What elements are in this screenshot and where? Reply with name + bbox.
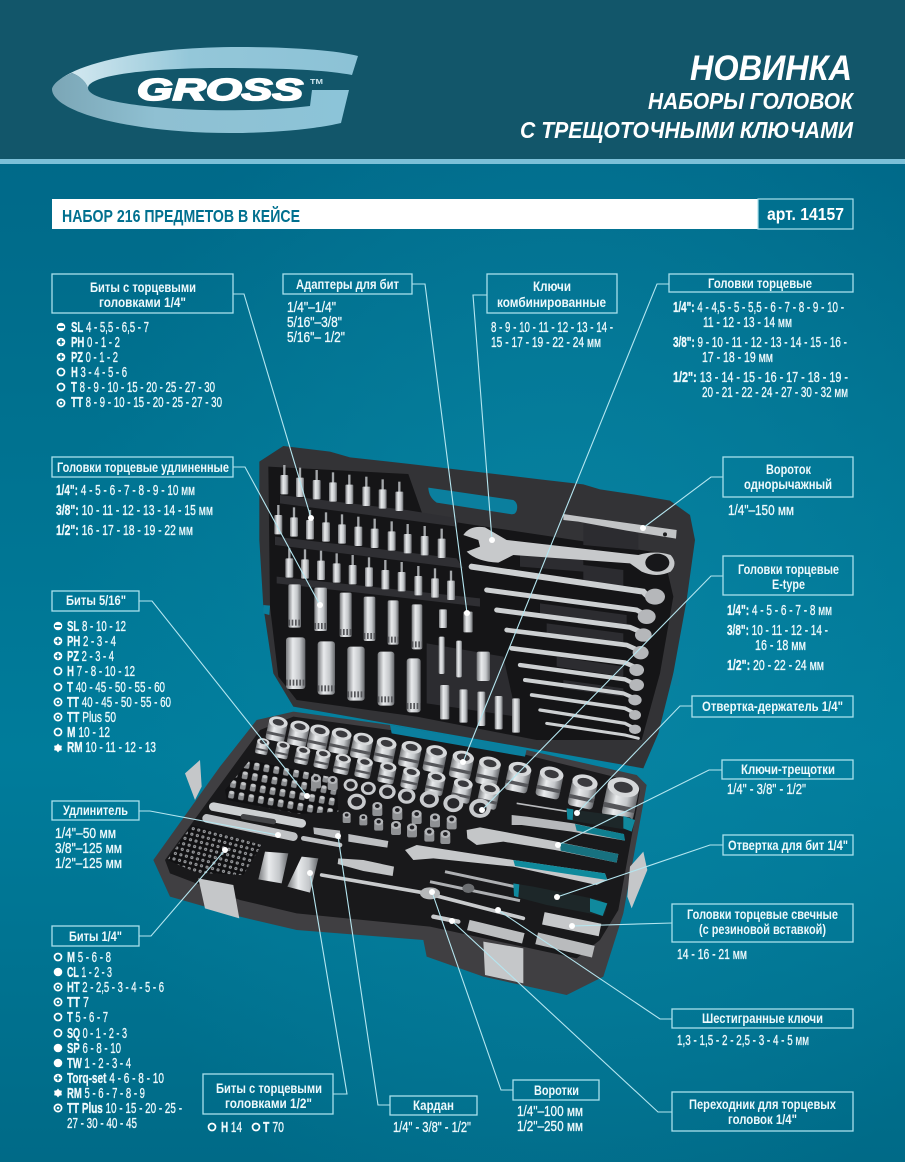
callout: головки торцевые свечные bbox=[672, 904, 853, 963]
callout: биты 1/4: SQ 0 - 1 - 2 - 3 bbox=[67, 1026, 127, 1042]
second row sockets bbox=[255, 737, 501, 810]
callout: удлинитель: Удлинитель bbox=[63, 802, 128, 818]
callout: биты 5/16: TT 40 - 45 - 50 - 55 - 60 bbox=[67, 695, 171, 711]
callout: биты 5/16 bbox=[52, 591, 171, 756]
callout: биты 1/4: TT 7 bbox=[67, 995, 89, 1011]
callout: головки торцевые свечные: (с резиновой вставкой) bbox=[699, 921, 826, 937]
callout: адаптеры для бит: 1/4"–1/4" bbox=[287, 300, 336, 316]
spark plug sockets bbox=[468, 918, 600, 952]
callout: биты 5/16: PZ 2 - 3 - 4 bbox=[67, 649, 114, 665]
callout: кардан: 1/4" - 3/8" - 1/2" bbox=[393, 1120, 471, 1136]
lid inner recess bbox=[268, 467, 673, 740]
callout: головки торцевые свечные: 14 - 16 - 21 мм bbox=[677, 947, 747, 963]
lid shell bbox=[259, 446, 695, 768]
callout: отвертка-держатель bbox=[692, 696, 853, 717]
callout: удлинитель bbox=[52, 801, 139, 872]
callout: головки торцевые удлиненные bbox=[52, 457, 233, 539]
callout: воротки: Воротки bbox=[534, 1082, 579, 1098]
callout: воротки: 1/4"–100 мм bbox=[517, 1104, 583, 1120]
callout: биты 5/16: TT Plus 50 bbox=[67, 710, 116, 726]
tool case: lower tray bbox=[153, 712, 647, 995]
callout: биты 1/4: Torq-set 4 - 6 - 8 - 10 bbox=[67, 1071, 164, 1087]
callout: биты с торцевыми головками 1/4: Биты с торцевыми bbox=[90, 279, 196, 295]
title: С ТРЕЩОТОЧНЫМИ КЛЮЧАМИ bbox=[520, 117, 853, 143]
callout: биты 1/4 bbox=[52, 926, 182, 1132]
callout: биты с торцевыми головками 1/4: T 8 - 9 - 10 - 15 - 20 - 25 - 27 - 30 bbox=[71, 380, 215, 396]
socket knurled ends bbox=[286, 623, 422, 706]
large combination wrench bbox=[463, 527, 674, 575]
callout: головки торцевые e-type: E-type bbox=[772, 576, 805, 592]
callout: шестигранные ключи bbox=[672, 1009, 853, 1049]
callout: адаптеры для бит: Адаптеры для бит bbox=[296, 276, 399, 292]
tray inner black bbox=[165, 717, 640, 958]
callout: ключи-трещотки: Ключи-трещотки bbox=[741, 761, 835, 777]
callout: головки торцевые e-type: Головки торцевые bbox=[738, 561, 839, 577]
callout: воротки: 1/2"–250 мм bbox=[517, 1119, 583, 1135]
callout: кардан: Кардан bbox=[413, 1097, 454, 1113]
long bars bbox=[322, 875, 523, 922]
header band bbox=[0, 0, 905, 164]
callout: головки торцевые: 11 - 12 - 13 - 14 мм bbox=[703, 315, 792, 331]
callout: биты с торцевыми головками 1/4: головками 1/4" bbox=[99, 294, 186, 310]
extensions bbox=[207, 807, 340, 845]
deep sockets row 1 bbox=[288, 584, 422, 649]
combination wrenches bbox=[472, 567, 660, 738]
callout: биты с торцевыми головками 1/2 bbox=[203, 1074, 333, 1136]
callout: биты 1/4: M 5 - 6 - 8 bbox=[67, 950, 111, 966]
callout: биты 1/4: T 5 - 6 - 7 bbox=[67, 1010, 108, 1026]
callout: ключи комбинированные: 15 - 17 - 19 - 22 - 24 мм bbox=[491, 335, 601, 351]
top row sockets bbox=[265, 715, 641, 822]
callout: кардан bbox=[390, 1096, 477, 1136]
callout: биты с торцевыми головками 1/4: TT 8 - 9 - 10 - 15 - 20 - 25 - 27 - 30 bbox=[71, 395, 222, 411]
callout: головки торцевые удлиненные: 3/8": 10 - 11 - 12 - 13 - 14 - 15 мм bbox=[56, 503, 213, 519]
callout: головки торцевые e-type: 3/8": 10 - 11 - 12 - 14 - bbox=[727, 623, 828, 639]
callout: ключи комбинированные: 8 - 9 - 10 - 11 - 12 - 13 - 14 - bbox=[491, 320, 613, 336]
callout: биты 1/4: TT Plus 10 - 15 - 20 - 25 - bbox=[67, 1101, 182, 1117]
callout: биты 5/16: Биты 5/16" bbox=[66, 592, 126, 608]
callout: биты 5/16: M 10 - 12 bbox=[67, 725, 110, 741]
callout: биты 5/16: H 7 - 8 - 10 - 12 bbox=[67, 664, 135, 680]
callout: биты 1/4: TW 1 - 2 - 3 - 4 bbox=[67, 1056, 131, 1072]
title: НОВИНКА bbox=[690, 49, 852, 88]
ratchets bbox=[405, 815, 625, 885]
tool case: open lid bbox=[259, 446, 695, 768]
callout: биты с торцевыми головками 1/4: PZ 0 - 1 - 2 bbox=[71, 350, 118, 366]
callout: отвертка для бит bbox=[723, 835, 853, 855]
row 1 bits bbox=[280, 465, 403, 511]
callout: шестигранные ключи: Шестигранные ключи bbox=[702, 1010, 823, 1026]
callout: ключи комбинированные: Ключи bbox=[533, 278, 571, 294]
callout: головки торцевые e-type: 1/2": 20 - 22 - 24 мм bbox=[727, 658, 824, 674]
callout: биты с торцевыми головками 1/4 bbox=[52, 274, 233, 411]
callout: удлинитель: 1/4"–50 мм bbox=[55, 826, 116, 842]
callout: биты 1/4: RM 5 - 6 - 7 - 8 - 9 bbox=[67, 1086, 145, 1102]
callout: шестигранные ключи: 1,3 - 1,5 - 2 - 2,5 - 3 - 4 - 5 мм bbox=[677, 1033, 809, 1049]
callout: ключи комбинированные: комбинированные bbox=[497, 294, 606, 310]
callout: биты с торцевыми головками 1/2: H 14 bbox=[221, 1120, 242, 1136]
small adapters and sockets bbox=[439, 609, 520, 733]
callout: биты 1/4: Биты 1/4" bbox=[69, 928, 122, 944]
callout: головки торцевые удлиненные: 1/2": 16 - 17 - 18 - 19 - 22 мм bbox=[56, 523, 193, 539]
callout: головки торцевые удлиненные: Головки торцевые удлиненные bbox=[57, 459, 229, 475]
single-arm wrench bbox=[563, 514, 677, 539]
callout: удлинитель: 1/2"–125 мм bbox=[55, 856, 122, 872]
callout: переходник: головок 1/4" bbox=[728, 1111, 797, 1127]
deep sockets row 2 bbox=[286, 637, 421, 712]
callout: адаптеры для бит: 5/16"– 1/2" bbox=[287, 330, 345, 346]
title bbox=[520, 49, 855, 143]
callout: биты 5/16: SL 8 - 10 - 12 bbox=[67, 619, 126, 635]
callout: головки торцевые: Головки торцевые bbox=[708, 275, 812, 291]
callout: головки торцевые e-type: 16 - 18 мм bbox=[755, 638, 806, 654]
callout: биты с торцевыми головками 1/2: T 70 bbox=[263, 1120, 284, 1136]
callout: головки торцевые e-type bbox=[723, 556, 853, 674]
callout: удлинитель: 3/8"–125 мм bbox=[55, 841, 122, 857]
small socket field bbox=[225, 760, 338, 814]
row 2 bits bbox=[274, 505, 446, 558]
torx socket rows bbox=[311, 774, 491, 844]
tray foam shell bbox=[153, 712, 647, 995]
callout: головки торцевые bbox=[669, 274, 853, 401]
callout: адаптеры для бит bbox=[283, 274, 412, 346]
logo: GROSS: TM bbox=[310, 79, 323, 86]
callout: биты с торцевыми головками 1/4: H 3 - 4 - 5 - 6 bbox=[71, 365, 127, 381]
callout: переходник bbox=[672, 1092, 853, 1131]
callout: головки торцевые свечные: Головки торцевые свечные bbox=[687, 906, 838, 922]
callout: головки торцевые e-type: 1/4": 4 - 5 - 6 - 7 - 8 мм bbox=[727, 603, 832, 619]
logo: GROSS bbox=[52, 47, 358, 133]
wrench blocks bbox=[427, 523, 638, 717]
white clips bbox=[185, 760, 647, 983]
callout: головки торцевые удлиненные: 1/4": 4 - 5 - 6 - 7 - 8 - 9 - 10 мм bbox=[56, 483, 195, 499]
handle hole bbox=[428, 488, 517, 514]
callout: биты 1/4: 27 - 30 - 40 - 45 bbox=[67, 1116, 137, 1132]
callout: вороток однорычажный bbox=[723, 457, 853, 519]
logo: GROSS: GROSS bbox=[137, 72, 303, 107]
callout: вороток однорычажный: 1/4"–150 мм bbox=[728, 503, 794, 519]
callout: отвертка для бит: Отвертка для бит 1/4" bbox=[728, 837, 848, 853]
callout: головки торцевые: 17 - 18 - 19 мм bbox=[702, 350, 773, 366]
callout: биты 5/16: PH 2 - 3 - 4 bbox=[67, 634, 116, 650]
callout: биты 5/16: RM 10 - 11 - 12 - 13 bbox=[67, 740, 156, 756]
callout: отвертка-держатель: Отвертка-держатель 1/4" bbox=[702, 698, 843, 714]
callout: биты 5/16: T 40 - 45 - 50 - 55 - 60 bbox=[67, 680, 165, 696]
callout: воротки bbox=[513, 1080, 599, 1135]
set title bar: арт. 14157 bbox=[767, 204, 844, 224]
callout: биты с торцевыми головками 1/4: PH 0 - 1 - 2 bbox=[71, 335, 120, 351]
callout: адаптеры для бит: 5/16"–3/8" bbox=[287, 315, 342, 331]
callout: биты с торцевыми головками 1/2: Биты с торцевыми bbox=[216, 1080, 322, 1096]
callout: ключи комбинированные bbox=[487, 274, 617, 351]
callout: биты 1/4: SP 6 - 8 - 10 bbox=[67, 1041, 121, 1057]
callout: вороток однорычажный: Вороток bbox=[766, 461, 812, 477]
screwdrivers bbox=[430, 803, 635, 916]
leader lines bbox=[139, 284, 723, 1112]
bits block bbox=[167, 825, 262, 875]
row 3 bits bbox=[285, 548, 455, 600]
callout: ключи-трещотки bbox=[722, 760, 853, 798]
callout: головки торцевые: 1/2": 13 - 14 - 15 - 16 - 17 - 18 - 19 - bbox=[673, 370, 848, 386]
teal hinge strip bbox=[390, 725, 527, 757]
adapters and cardan joints bbox=[258, 827, 394, 893]
callout: ключи-трещотки: 1/4" - 3/8" - 1/2" bbox=[727, 782, 806, 798]
callout: биты с торцевыми головками 1/4: SL 4 - 5,5 - 6,5 - 7 bbox=[71, 320, 149, 336]
callout: вороток однорычажный: однорычажный bbox=[744, 476, 832, 492]
bit rows separators bbox=[275, 495, 480, 607]
teal side tabs bbox=[263, 605, 680, 686]
callout: биты с торцевыми головками 1/2: головками 1/2" bbox=[225, 1095, 312, 1111]
title: НАБОРЫ ГОЛОВОК bbox=[648, 88, 855, 114]
callout: биты 1/4: CL 1 - 2 - 3 bbox=[67, 965, 112, 981]
set title bar: НАБОР 216 ПРЕДМЕТОВ В КЕЙСЕ bbox=[62, 205, 300, 226]
callout: переходник: Переходник для торцевых bbox=[689, 1096, 836, 1112]
set title bar bbox=[52, 199, 853, 229]
callout: биты 1/4: HT 2 - 2,5 - 3 - 4 - 5 - 6 bbox=[67, 980, 164, 996]
